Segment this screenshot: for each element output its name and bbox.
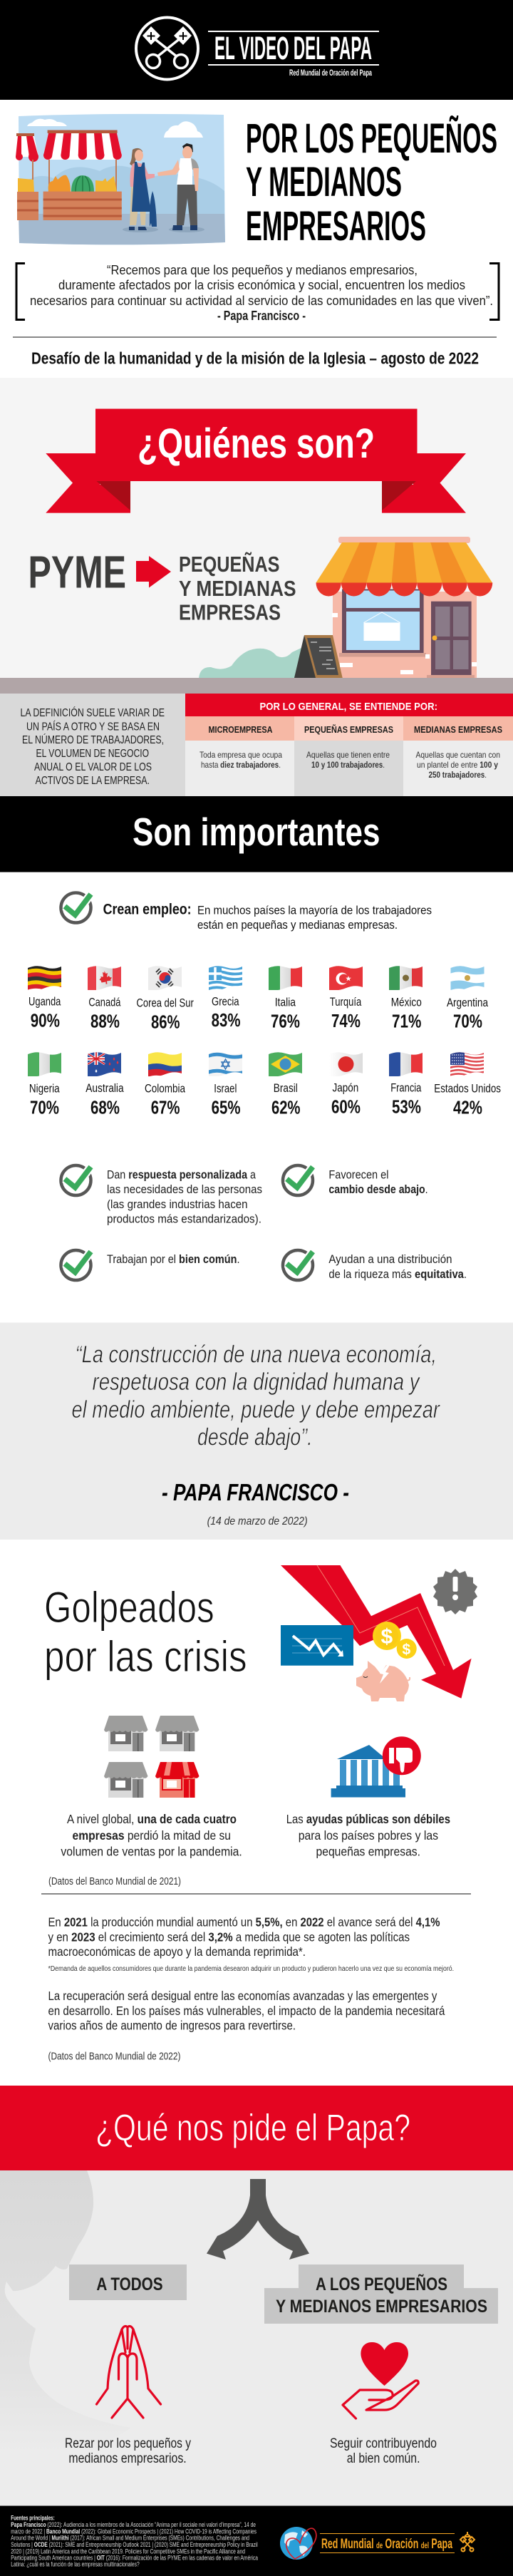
text: one of four firms: empresas perdió la mitad de su xyxy=(73,1828,231,1843)
text: uneven recovery: varios años de aumento de ingresos para revertirse. xyxy=(48,2019,296,2033)
country: México xyxy=(389,966,423,1032)
quote with brackets: “Recemos para que los pequeños y medianos empresarios, xyxy=(107,262,418,277)
country: Nigeria: 70% xyxy=(30,1097,59,1118)
country: Brasil: Brasil xyxy=(274,1082,298,1095)
label: a todos xyxy=(69,2265,187,2300)
text: global production: macroeconómicas de apoyo y la demanda reprimida*. xyxy=(48,1944,306,1959)
text: uneven recovery xyxy=(48,1989,445,2033)
text: crean empleo: están en pequeñas y medianas empresas. xyxy=(197,918,398,932)
text: seguir contribuyendo xyxy=(330,2436,437,2466)
country: Australia xyxy=(86,1052,124,1118)
heading: golpeados por las crisis: Golpeados xyxy=(44,1583,214,1632)
heading band: son importantes: Son importantes xyxy=(133,810,380,854)
country: Colombia xyxy=(145,1056,186,1118)
quote text xyxy=(71,1341,440,1451)
ribbon heading: ¿Quiénes son? xyxy=(138,421,375,467)
country: Canadá xyxy=(88,966,121,1032)
icon: red arrow xyxy=(136,556,171,587)
table: company sizes: un plantel de entre 100 y xyxy=(417,760,498,770)
text: seguir contribuyendo: al bien común. xyxy=(347,2451,420,2466)
text: crean empleo: Crean empleo: xyxy=(103,902,192,918)
PYME label: EMPRESAS xyxy=(179,600,281,624)
title xyxy=(246,115,497,249)
quote attribution: (14 de marzo de 2022) xyxy=(207,1515,308,1527)
country: Estados Unidos: 42% xyxy=(453,1097,482,1118)
benefit: cambio desde abajo: cambio desde abajo. xyxy=(328,1183,428,1196)
text: public aid xyxy=(286,1812,450,1858)
benefit: bien común xyxy=(61,1250,240,1280)
man xyxy=(157,143,204,232)
text: global production: *Demanda de aquellos consumidores que durante la pandemia desearon adquirir un producto y pudieron hacerlo una vez que su economía mejoró. xyxy=(48,1965,454,1973)
benefit: equitativa: Ayudan a una distribución xyxy=(328,1252,452,1266)
country: Canadá: Canadá xyxy=(88,996,121,1009)
benefit: equitativa xyxy=(283,1250,467,1281)
text: global production: En 2021 la producción mundial aumentó un 5,5%, en 2022 el avance será del 4,1% xyxy=(48,1915,440,1930)
country: Grecia: 83% xyxy=(212,1009,241,1031)
text: global production: y en 2023 el crecimiento será del 3,2% a medida que se agoten las políticas xyxy=(48,1930,410,1944)
country: Uganda: Uganda xyxy=(28,996,61,1009)
text: rezar: medianos empresarios. xyxy=(68,2451,187,2466)
country: Grecia: Grecia xyxy=(212,996,239,1009)
icon: one of four shops xyxy=(104,1716,200,1798)
benefit: respuesta personalizada: productos más estandarizados). xyxy=(107,1212,261,1226)
table: company sizes: hasta diez trabajadores. xyxy=(201,760,281,770)
text: rezar: Rezar por los pequeños y xyxy=(65,2436,191,2451)
quote attribution xyxy=(162,1479,349,1527)
text: crean empleo xyxy=(103,902,432,932)
footer wordmark: Red Mundial de Oración del Papa xyxy=(321,2537,452,2552)
text: public aid: pequeñas empresas. xyxy=(316,1844,420,1858)
country: Grecia xyxy=(209,966,242,1026)
main stall xyxy=(43,130,122,220)
benefits list xyxy=(61,1165,467,1281)
country: Uganda xyxy=(28,966,61,1027)
country: Japón: 60% xyxy=(331,1096,361,1118)
country: Uganda: 90% xyxy=(31,1010,60,1031)
panel: definition note: LA DEFINICIÓN SUELE VARIAR DE xyxy=(20,706,165,719)
heading band: que nos pide el papa: ¿Qué nos pide el Papa? xyxy=(95,2107,410,2149)
quote with brackets: - Papa Francisco - xyxy=(217,308,306,323)
crean empleo xyxy=(61,892,432,932)
PYME label: PEQUEÑAS xyxy=(179,552,279,577)
panel: what the pope asks xyxy=(0,2170,513,2506)
country: Italia: Italia xyxy=(275,996,296,1009)
text: public aid: para los países pobres y las xyxy=(299,1828,438,1843)
table: company sizes: 10 y 100 trabajadores. xyxy=(311,760,385,770)
icon: vatican keys xyxy=(460,2532,475,2552)
icon: shop xyxy=(199,537,492,678)
country: Turquía: Turquía xyxy=(330,996,362,1009)
benefit: respuesta personalizada: las necesidades de las personas xyxy=(107,1183,262,1196)
sources text: Solutions | OCDE (2021): SME and Entrepreneurship Outlook 2021 | (2020) SME and Entrepreneurship Policy in Brazil xyxy=(11,2541,258,2548)
country: Italia xyxy=(269,966,302,1032)
source note 2022: (Datos del Banco Mundial de 2022) xyxy=(48,2051,180,2062)
country: Argentina: 70% xyxy=(453,1011,482,1032)
quote text: respetuosa con la dignidad humana y xyxy=(93,1369,420,1396)
quote attribution: - PAPA FRANCISCO - xyxy=(162,1479,349,1505)
sources text: Participating South American countries | OIT (2016): Formalización de las PYME en las cadenas de valor en América xyxy=(11,2554,258,2561)
panel: definition note: UN PAÍS A OTRO Y SE BASA EN xyxy=(26,720,160,733)
country: Australia: 68% xyxy=(90,1097,120,1118)
benefit: cambio desde abajo xyxy=(283,1165,428,1196)
benefit: respuesta personalizada xyxy=(61,1165,262,1226)
country: México: 71% xyxy=(392,1011,421,1032)
text: global production xyxy=(48,1915,454,1973)
PYME label xyxy=(28,546,296,624)
ribbon heading xyxy=(46,409,466,513)
benefit: bien común: Trabajan por el bien común. xyxy=(107,1252,240,1266)
benefit: equitativa: de la riqueza más equitativa. xyxy=(328,1267,467,1281)
label: a todos: A TODOS xyxy=(96,2274,163,2294)
logo wordmark xyxy=(208,30,379,78)
icon: falling chart illustration: $ xyxy=(380,1625,393,1649)
text: one of four firms xyxy=(61,1812,242,1858)
icon: crossed keys logo xyxy=(136,17,198,80)
text: uneven recovery: La recuperación será desigual entre las economías avanzadas y las emergentes y xyxy=(48,1989,437,2003)
quote text: desde abajo”. xyxy=(197,1424,312,1451)
text: public aid: Las ayudas públicas son débiles xyxy=(286,1812,450,1826)
panel: quienes son xyxy=(0,378,513,796)
quote with brackets: duramente afectados por la crisis económica y social, encuentren los medios xyxy=(58,277,465,292)
sources text: marzo de 2022 | Banco Mundial (2022): Global Economic Prospects | (2021) How COVID-19 is Affecting Companies xyxy=(11,2528,256,2535)
country: Nigeria xyxy=(28,1052,61,1118)
table: company sizes: Aquellas que tienen entre xyxy=(306,750,390,760)
country: Israel xyxy=(209,1052,242,1114)
country: Corea del Sur: 86% xyxy=(151,1011,180,1032)
woman xyxy=(123,148,158,232)
left stall xyxy=(16,133,38,220)
logo wordmark: Red Mundial de Oración del Papa xyxy=(289,69,372,78)
country grid xyxy=(26,966,501,1118)
panel: pope quote xyxy=(0,1323,513,1540)
heading: golpeados por las crisis xyxy=(44,1583,247,1681)
icon: check xyxy=(61,892,91,922)
table: company sizes: POR LO GENERAL, SE ENTIENDE POR: xyxy=(259,701,437,713)
sources text xyxy=(11,2515,258,2568)
table: company sizes: Toda empresa que ocupa xyxy=(200,750,282,760)
country: Francia xyxy=(389,1052,423,1118)
text: one of four firms: volumen de ventas por la pandemia. xyxy=(61,1844,242,1858)
heading band: que nos pide el papa xyxy=(0,2086,513,2170)
sources text: Fuentes principales: xyxy=(11,2515,55,2522)
title: Y MEDIANOS xyxy=(246,159,402,205)
text: uneven recovery: en desarrollo. En los países más vulnerables, el impacto de la pandemia necesitará xyxy=(48,2004,445,2018)
sources text: Papa Francisco (2022): Audiencia a los miembros de la Asociación “Anima per il sociale nei valori d’impresa”, 14 de xyxy=(11,2521,256,2528)
text: rezar xyxy=(65,2436,191,2466)
source note 2021: (Datos del Banco Mundial de 2021) xyxy=(48,1876,181,1887)
country: Brasil: 62% xyxy=(271,1097,301,1118)
illustration: market stall handshake xyxy=(16,114,225,244)
country: Canadá: 88% xyxy=(90,1011,120,1032)
country: Brasil xyxy=(269,1052,302,1118)
country: Japón: Japón xyxy=(332,1082,358,1095)
country: Israel: Israel xyxy=(214,1083,237,1096)
quote with brackets xyxy=(16,262,499,323)
icon: globe and heart xyxy=(280,2527,316,2560)
country: Colombia: Colombia xyxy=(145,1082,186,1095)
benefit: cambio desde abajo: Favorecen el xyxy=(328,1168,389,1182)
text: one of four firms: A nivel global, una de cada cuatro xyxy=(67,1812,237,1826)
sources text: Around the World | Muriithi (2017): African Small and Medium Enterprises (SMEs) Contributions, Challenges and xyxy=(11,2535,249,2542)
table: company sizes: PEQUEÑAS EMPRESAS xyxy=(304,724,393,735)
label: a los pequenos y medianos empresarios xyxy=(264,2265,498,2324)
quote text: “La construcción de una nueva economía, xyxy=(76,1341,437,1369)
country: Colombia: 67% xyxy=(151,1097,180,1118)
country: Argentina: Argentina xyxy=(447,996,489,1009)
country: Corea del Sur: Corea del Sur xyxy=(137,996,194,1009)
country: Turquía xyxy=(329,966,363,1031)
icon: heart in hand xyxy=(343,2342,418,2418)
table: company sizes xyxy=(185,694,513,796)
panel: definition note xyxy=(0,694,185,796)
country: Turquía: 74% xyxy=(331,1010,361,1031)
sources text: 2020 | (2019) Latin America and the Caribbean 2019. Policies for Competitive SMEs in the Pacific Alliance and xyxy=(11,2547,245,2555)
country: Argentina xyxy=(447,966,489,1032)
icon: falling chart illustration: $ xyxy=(402,1642,410,1658)
country: Israel: 65% xyxy=(212,1097,241,1118)
icon: praying hands xyxy=(97,2327,161,2418)
heading band: son importantes xyxy=(0,796,513,872)
panel: definition note: EL NÚMERO DE TRABAJADORES, xyxy=(22,733,164,746)
country: Francia: Francia xyxy=(390,1081,422,1094)
country: Estados Unidos xyxy=(434,1051,501,1118)
table: company sizes: Aquellas que cuentan con xyxy=(416,750,500,760)
text: seguir contribuyendo: Seguir contribuyendo xyxy=(330,2436,437,2451)
country: Japón xyxy=(332,1052,363,1113)
footer band xyxy=(0,2506,513,2576)
text: crean empleo: En muchos países la mayoría de los trabajadores xyxy=(197,904,432,917)
label: a los pequenos y medianos empresarios: A LOS PEQUEÑOS xyxy=(316,2273,447,2294)
sources text: Latina: ¿cuál es la función de las empresas multinacionales? xyxy=(11,2561,140,2568)
PYME label: Y MEDIANAS xyxy=(179,576,296,601)
header band xyxy=(0,0,513,100)
table: company sizes: MICROEMPRESA xyxy=(208,724,273,735)
icon: falling chart illustration xyxy=(281,1565,477,1701)
panel: definition note: ANUAL O EL VALOR DE LOS xyxy=(34,761,152,773)
country: Corea del Sur xyxy=(137,966,194,1032)
panel: definition note: EL VOLUMEN DE NEGOCIO xyxy=(36,748,149,760)
country: Nigeria: Nigeria xyxy=(29,1083,60,1096)
panel: definition note: ACTIVOS DE LA EMPRESA. xyxy=(36,775,150,787)
table: company sizes: 250 trabajadores. xyxy=(429,770,487,780)
icon: bank with thumb down xyxy=(331,1736,421,1798)
pope silhouette xyxy=(0,2170,131,2453)
country: Italia: 76% xyxy=(271,1011,300,1032)
country: Francia: 53% xyxy=(392,1096,421,1118)
benefit: respuesta personalizada: Dan respuesta personalizada a xyxy=(107,1168,256,1182)
country: Australia: Australia xyxy=(86,1082,124,1095)
heading: golpeados por las crisis: por las crisis xyxy=(44,1632,247,1681)
PYME label: PYME xyxy=(28,546,126,597)
benefit: respuesta personalizada: (las grandes industrias hacen xyxy=(107,1197,248,1211)
icon: splitting arrow xyxy=(207,2179,309,2260)
country: México: México xyxy=(391,996,422,1009)
